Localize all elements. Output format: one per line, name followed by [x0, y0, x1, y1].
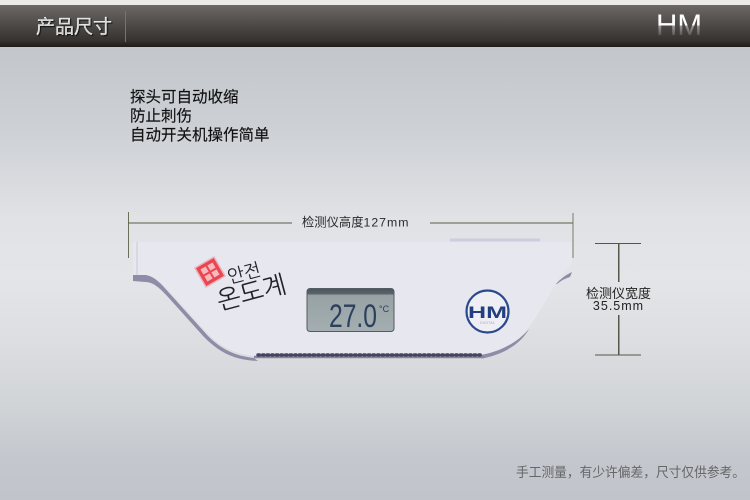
device shadow edge — [133, 275, 258, 361]
red stamp mark — [195, 257, 225, 287]
device body — [133, 242, 572, 356]
feature text block — [130, 88, 270, 144]
width dimension line — [586, 243, 651, 356]
feature text block: 自动开关机操作简单 — [130, 126, 270, 144]
LCD display: 27.0 — [329, 298, 377, 334]
heading: product size: 产品尺寸 — [36, 16, 112, 38]
brand logo: HM: HM — [656, 9, 702, 42]
left seam — [136, 242, 138, 275]
height dimension line: 检测仪高度127mm — [302, 214, 410, 230]
LCD display — [307, 288, 394, 334]
footnote: 手工测量，有少许偏差，尺寸仅供参考。 — [516, 464, 745, 480]
width dimension line: 35.5mm — [593, 299, 644, 313]
thermometer device — [133, 238, 572, 361]
right notch shading — [556, 272, 572, 284]
HM digital logo — [466, 290, 508, 332]
Korean product name: 안전 — [225, 259, 263, 287]
HM digital logo: DIGITAL — [480, 320, 496, 325]
Korean product name — [210, 254, 289, 316]
HM digital logo: HM — [468, 303, 507, 322]
width dimension line: 检测仪宽度 — [586, 286, 651, 301]
feature text block: 防止刺伤 — [130, 107, 192, 125]
serrated grip edge — [254, 356, 484, 358]
top slider ridge — [450, 238, 540, 242]
feature text block: 探头可自动收缩 — [130, 88, 239, 106]
header bar — [0, 5, 750, 47]
Korean product name: 온도계 — [214, 270, 289, 316]
LCD display: °C — [379, 304, 390, 314]
